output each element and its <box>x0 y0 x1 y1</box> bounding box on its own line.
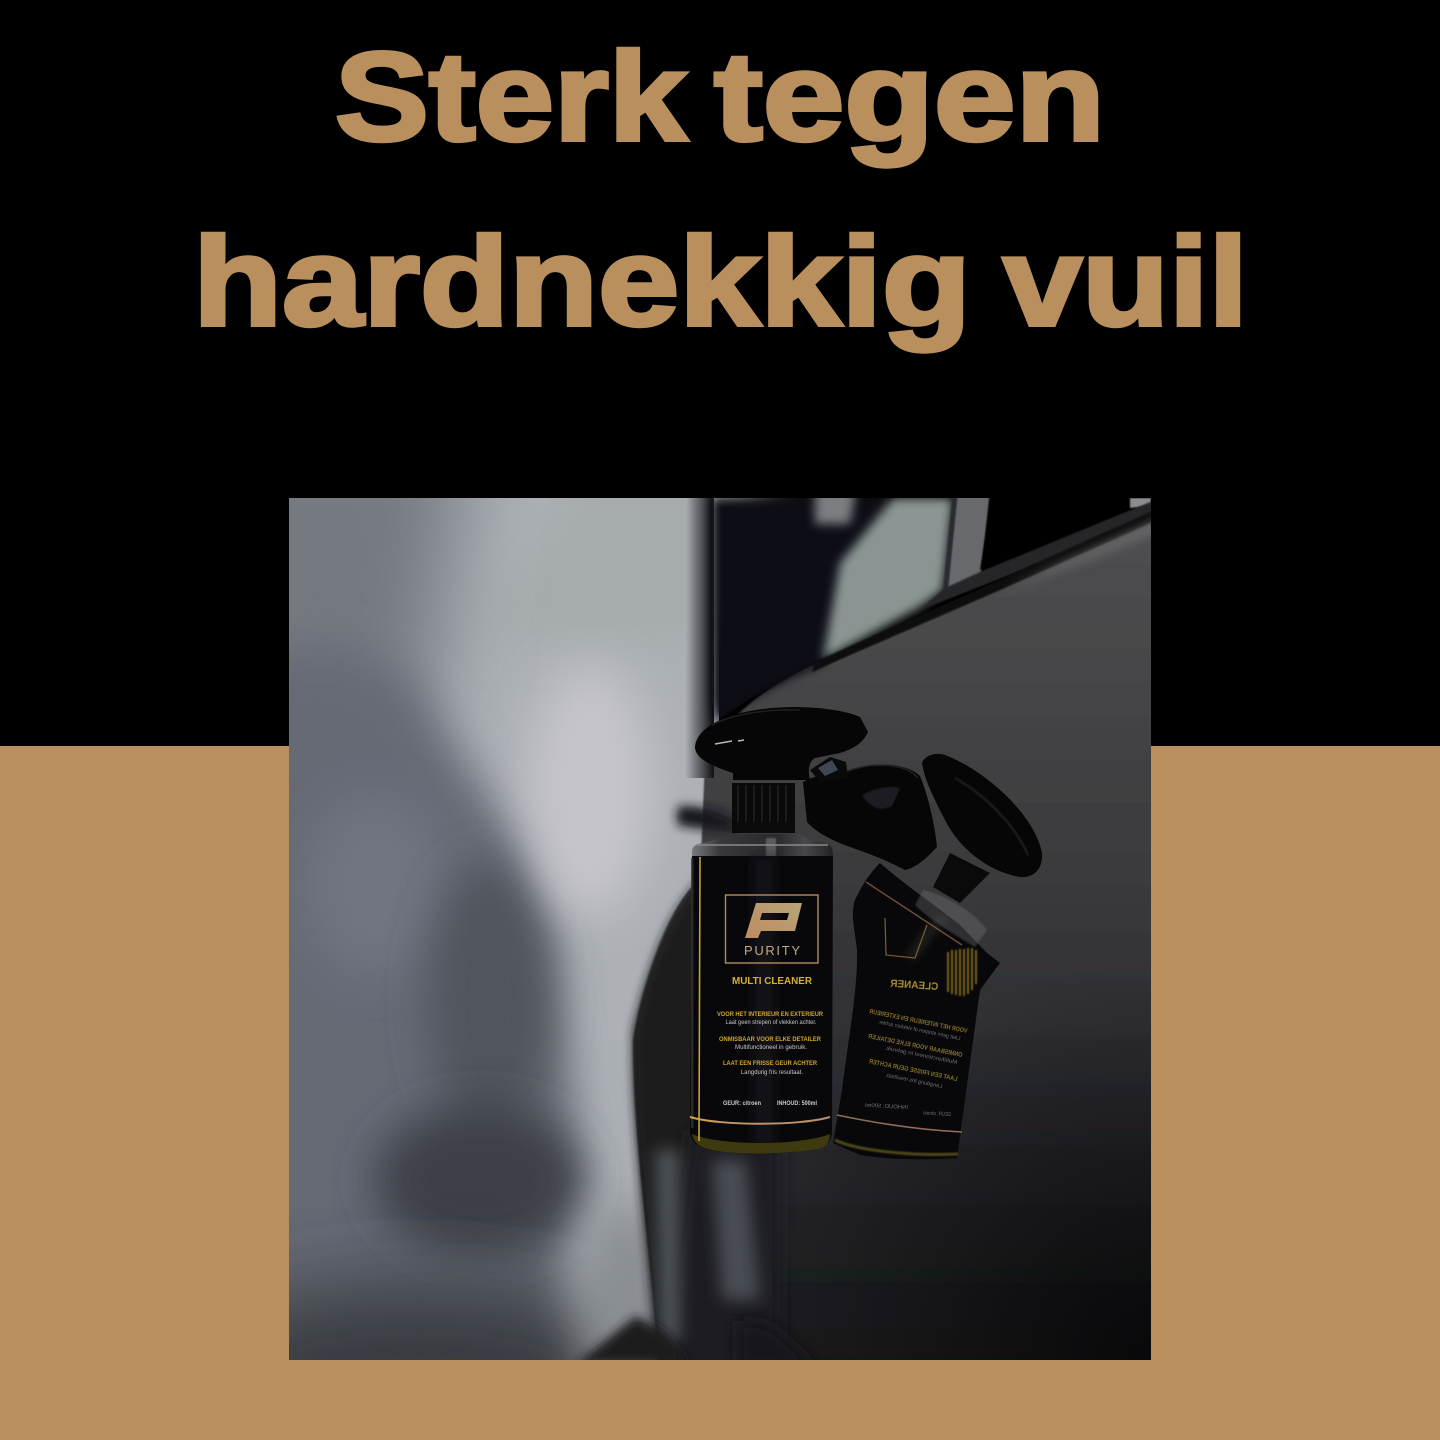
mirrored label text <box>865 978 968 1118</box>
photo background: blurred wall <box>289 498 787 1360</box>
label text: GEUR: citroen <box>723 1100 761 1107</box>
rear label stripes <box>948 948 976 996</box>
label text: Langdurig fris resultaat. <box>741 1070 803 1076</box>
title: tegen <box>714 26 1105 167</box>
label text: Laat geen strepen of vlekken achter. <box>726 1020 817 1026</box>
mirrored label text: GEUR: citroen <box>923 1111 951 1118</box>
photo: spray bottles on car door <box>289 498 1151 1360</box>
rear bottle <box>803 754 1042 1159</box>
bottle body <box>690 856 833 1154</box>
label text: ONMISBAAR VOOR ELKE DETAILER <box>719 1036 821 1043</box>
rear sprayer head <box>922 754 1042 877</box>
photo: car body <box>575 510 1170 1380</box>
mirrored label text: Laat geen strepen of vlekken achter. <box>877 1019 961 1042</box>
title: hardnekkig <box>193 211 971 352</box>
rear sprayer linkage <box>803 765 937 870</box>
label text <box>717 943 823 1107</box>
photo: door pillar and window <box>677 490 1160 832</box>
front bottle <box>690 707 868 1154</box>
mirrored label text: VOOR HET INTERIEUR EN EXTERIEUR <box>868 1008 968 1035</box>
mirrored label text: Langdurig fris resultaat. <box>884 1073 943 1090</box>
label text: MULTI CLEANER <box>732 975 812 987</box>
mirrored label text: INHOUD: 500ml <box>865 1103 908 1111</box>
label text: VOOR HET INTERIEUR EN EXTERIEUR <box>717 1011 823 1018</box>
title: Sterk <box>335 26 688 167</box>
mirrored label text: ONMISBAAR VOOR ELKE DETAILER <box>867 1033 963 1059</box>
rear body <box>833 863 1000 1159</box>
rear neck <box>933 853 990 903</box>
label text: LAAT EEN FRISSE GEUR ACHTER <box>723 1060 817 1067</box>
liquid at base <box>692 1134 830 1154</box>
neck collar <box>732 783 795 833</box>
logo frame <box>726 895 818 963</box>
mirrored label text: Multifunctioneel in gebruik. <box>884 1045 958 1066</box>
mirrored label text: LAAT EEN FRISSE GEUR ACHTER <box>868 1058 958 1083</box>
label text: PURITY <box>744 943 802 958</box>
sprayer head <box>695 707 868 780</box>
label trim lines <box>692 877 833 879</box>
tan lower background band <box>0 746 1440 1440</box>
clear shoulder <box>692 834 833 856</box>
icon: P logo <box>745 903 802 938</box>
mirrored label text: CLEANER <box>890 978 939 993</box>
rear clear shoulder <box>915 890 987 947</box>
title <box>193 26 1248 352</box>
label text: Multifunctioneel in gebruik. <box>735 1045 807 1051</box>
title: vuil <box>1003 211 1248 352</box>
label text: INHOUD: 500ml <box>777 1100 817 1107</box>
